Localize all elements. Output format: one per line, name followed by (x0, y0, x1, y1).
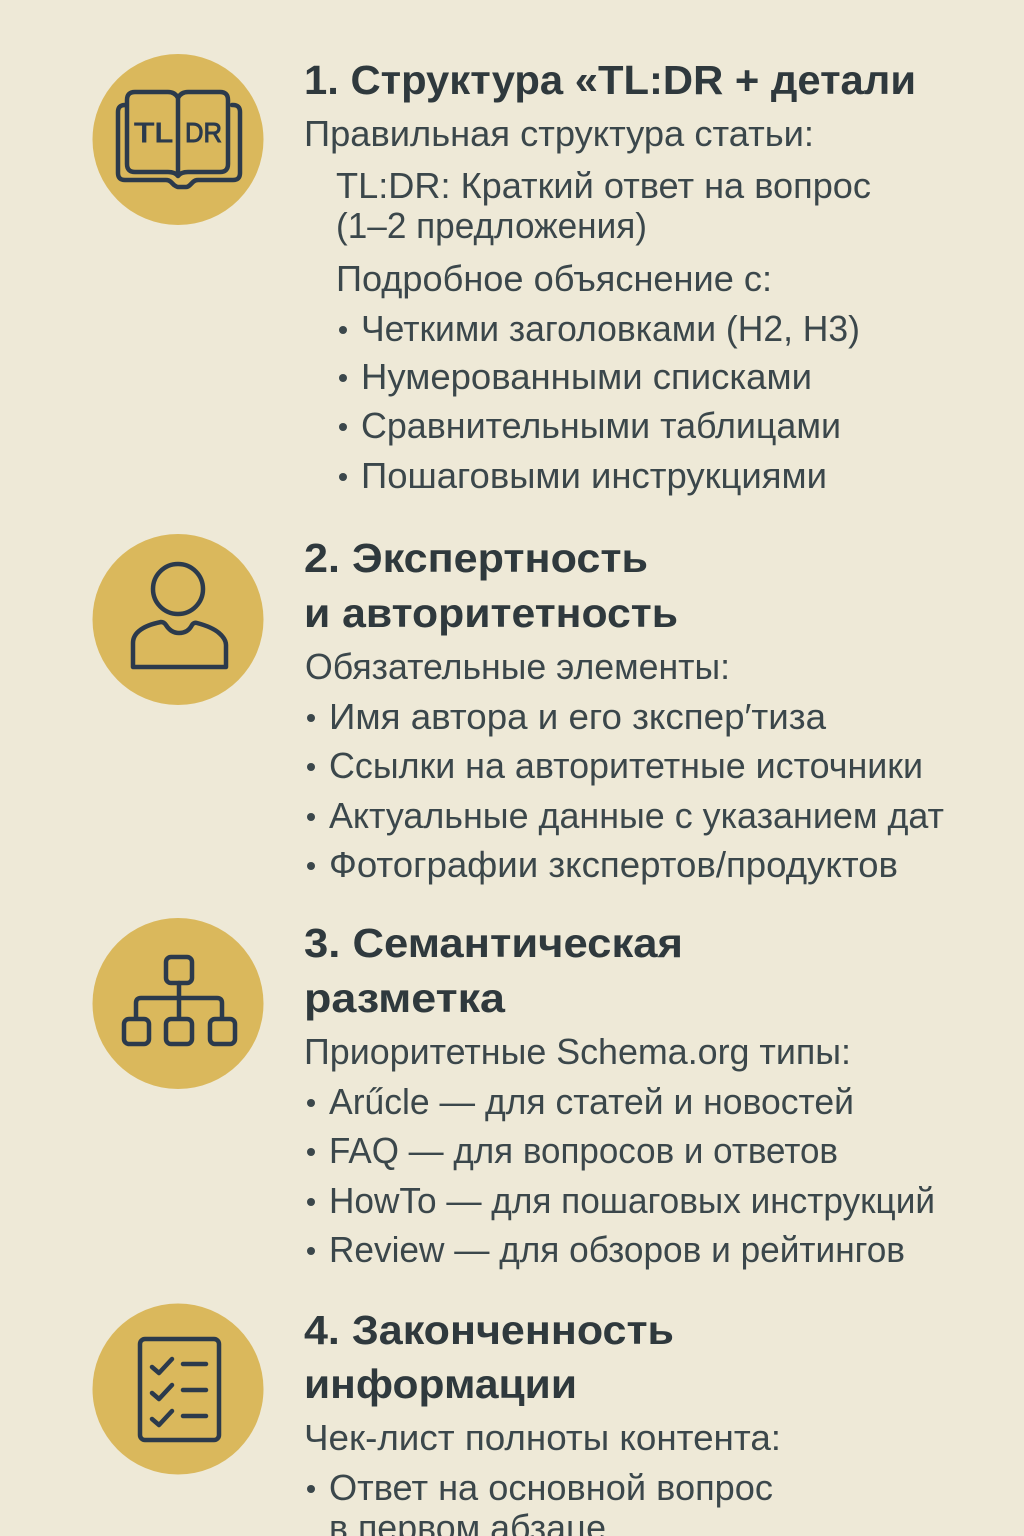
heading: section 3: разметка (304, 975, 506, 1021)
bullet list: section 3 (307, 1081, 935, 1270)
bullet list: section 2: Ссылки на авторитетные источники (329, 745, 923, 786)
icon: TL:DR book: DR (185, 117, 222, 148)
intro text: section 1: Правильная структура статьи: (304, 113, 814, 154)
bullet list: section 4 (307, 1467, 773, 1536)
icon: hierarchy (92, 918, 264, 1089)
intro text: section 3: Приоритетные Schema.org типы: (304, 1031, 851, 1072)
bullet list: section 3: FAQ — для вопросов и ответов (329, 1130, 838, 1171)
bullet list: section 2: Актуальные данные с указанием дат (329, 795, 944, 836)
bullet list: section 1: Пошаговыми инструкциями (361, 455, 827, 496)
heading: section 2: 2. Экспертность (304, 535, 648, 581)
panel: section 1 TL:DR structure (92, 54, 916, 496)
heading: section 4: информации (304, 1361, 577, 1407)
panel: section 4 completeness (92, 1304, 781, 1536)
bullet list: section 1: Четкими заголовками (H2, H3) (361, 308, 860, 349)
heading: section 2: и авторитетность (304, 590, 678, 636)
text block: TL:DR explanation: TL:DR: Краткий ответ на вопрос (336, 165, 871, 206)
bullet list: section 2: Имя автора и его зкспер′тиза (329, 696, 827, 737)
heading: section 3: 3. Семантическая (304, 920, 683, 966)
heading: section 3 (304, 920, 683, 1021)
bullet list: section 3: Review — для обзоров и рейтингов (329, 1229, 905, 1270)
bullet list: section 2: Фотографии зкспертов/продуктов (329, 844, 898, 885)
panel: section 3 semantic markup (92, 918, 935, 1270)
bullet list: section 4: Ответ на основной вопрос (329, 1467, 773, 1508)
text block: TL:DR explanation (336, 165, 871, 246)
heading: section 4: 4. Законченность (304, 1307, 674, 1353)
heading: section 4 (304, 1307, 674, 1407)
heading: section 2 (304, 535, 678, 636)
icon: person (92, 534, 264, 705)
bullet list: section 1: Нумерованными списками (361, 356, 812, 397)
text: detailed explanation lead-in: Подробное объяснение с: (336, 258, 772, 299)
text block: TL:DR explanation: (1–2 предложения) (336, 205, 647, 246)
icon: TL:DR book (92, 54, 264, 225)
bullet list: section 3: Arűcle — для статей и новостей (329, 1081, 854, 1122)
bullet list: section 1 (339, 308, 860, 496)
panel: section 2 expertise (92, 534, 944, 885)
bullet list: section 1: Сравнительными таблицами (361, 405, 841, 446)
icon: checklist (92, 1304, 264, 1474)
heading: section 1: 1. Структура «TL:DR + детали (304, 57, 916, 103)
bullet list: section 3: HowTo — для пошаговых инструкций (329, 1180, 935, 1221)
icon: TL:DR book: TL (134, 117, 173, 148)
intro text: section 2: Обязательные элементы: (305, 646, 730, 687)
bullet list: section 2 (307, 696, 944, 885)
intro text: section 4: Чек-лист полноты контента: (304, 1417, 781, 1458)
